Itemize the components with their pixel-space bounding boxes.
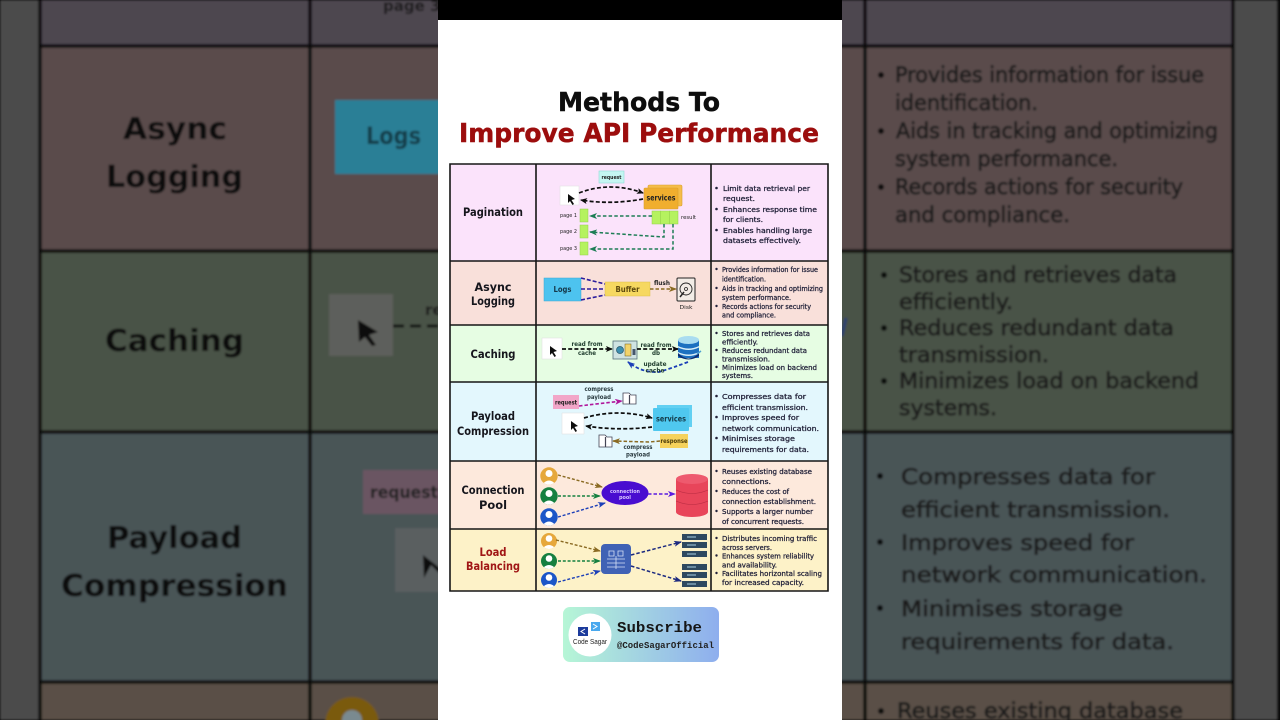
- panel: blurred backdrop right: systems.: [899, 396, 997, 420]
- benefits: pagination: [715, 184, 817, 245]
- subscribe badge: @CodeSagarOfficial: [617, 641, 715, 651]
- diagram: caching: cache: [578, 350, 596, 357]
- row headings: Balancing: [466, 559, 520, 573]
- panel: blurred backdrop right: Records actions for security: [895, 175, 1183, 199]
- benefits: payload compression: Improves speed for: [722, 413, 800, 422]
- subscribe badge: Subscribe: [617, 620, 702, 637]
- panel: blurred backdrop right: Provides information for issue: [895, 63, 1204, 87]
- benefits: connection pool: Reduces the cost of: [722, 487, 789, 496]
- comparison table: [450, 164, 828, 591]
- row headings: Caching: [470, 347, 516, 361]
- diagram: pagination: page 3: [560, 246, 577, 252]
- benefits: async logging: Records actions for security: [722, 302, 812, 311]
- benefits: caching: efficiently.: [722, 338, 758, 346]
- benefits: pagination: datasets effectively.: [723, 236, 801, 245]
- row headings: Load: [480, 545, 506, 559]
- top black bar: [438, 0, 842, 20]
- benefits: connection pool: connections.: [722, 477, 771, 486]
- panel: blurred backdrop right: efficient transmission.: [901, 498, 1170, 522]
- benefits: payload compression: Minimises storage: [722, 434, 795, 443]
- panel: blurred backdrop right: identification.: [895, 91, 1038, 115]
- diagram: caching: db: [652, 350, 661, 357]
- panel: blurred backdrop right: efficiently.: [899, 290, 1013, 314]
- benefits: payload compression: requirements for data.: [722, 445, 809, 454]
- benefits: caching: systems.: [722, 371, 753, 380]
- benefits: pagination: Enables handling large: [723, 226, 812, 235]
- row headings: Async: [474, 280, 512, 294]
- row headings: Connection: [462, 483, 524, 497]
- panel: blurred backdrop right: Minimizes load on backend: [899, 369, 1199, 393]
- diagram: async logging: Logs: [554, 285, 572, 294]
- diagram: payload compression: [553, 387, 692, 458]
- row headings: Pagination: [463, 205, 523, 219]
- benefits: caching: Minimizes load on backend: [722, 363, 817, 372]
- diagram: payload compression: payload: [587, 395, 611, 401]
- diagram: payload compression: compress: [624, 445, 653, 451]
- benefits: load balancing: across servers.: [722, 543, 772, 552]
- benefits: caching: Reduces redundant data: [722, 346, 807, 355]
- panel: blurred backdrop right: Reduces redundant data: [899, 316, 1174, 340]
- panel: blurred backdrop right: network communication.: [901, 563, 1207, 587]
- row headings: Payload: [471, 409, 515, 423]
- benefits: payload compression: efficient transmission.: [722, 403, 808, 412]
- title: [459, 88, 819, 149]
- benefits: caching: Stores and retrieves data: [722, 329, 810, 338]
- diagram: caching: update: [644, 361, 666, 368]
- diagram: connection pool: pool: [619, 495, 631, 501]
- diagram: async logging: Disk: [680, 305, 693, 311]
- diagram: pagination: services: [646, 194, 676, 202]
- panel: blurred backdrop right: [840, 0, 1280, 720]
- benefits: connection pool: Reuses existing database: [722, 467, 812, 476]
- benefits: load balancing: Facilitates horizontal scaling: [722, 569, 822, 578]
- panel: blurred backdrop right: and compliance.: [895, 203, 1070, 227]
- benefits: pagination: for clients.: [723, 215, 763, 224]
- row headings: Logging: [471, 294, 515, 308]
- title: Improve API Performance: [459, 119, 819, 149]
- panel: blurred backdrop right: transmission.: [899, 343, 1049, 367]
- row headings: [457, 205, 529, 573]
- diagram: connection pool: [540, 467, 708, 527]
- benefits: connection pool: [715, 467, 816, 526]
- title: Methods To: [558, 88, 720, 118]
- benefits: caching: transmission.: [722, 354, 770, 364]
- diagram: payload compression: request: [555, 398, 577, 406]
- diagram: caching: cache: [646, 368, 664, 374]
- panel: blurred backdrop left: Async: [123, 112, 227, 147]
- diagram: caching: [542, 336, 701, 374]
- benefits: load balancing: Enhances system reliability: [722, 552, 815, 560]
- diagram: connection pool: connection: [610, 489, 640, 495]
- benefits: payload compression: network communication.: [722, 424, 819, 433]
- benefits: async logging: Provides information for issue: [722, 265, 818, 274]
- benefits: async logging: [715, 265, 823, 320]
- diagram: caching: read from: [640, 342, 672, 349]
- benefits: connection pool: connection establishment.: [722, 497, 816, 506]
- subscribe badge: Code Sagar: [573, 639, 608, 646]
- benefits: async logging: Aids in tracking and optimizing: [722, 284, 823, 293]
- diagram: caching: read from: [572, 341, 602, 348]
- benefits: pagination: Limit data retrieval per: [723, 184, 811, 193]
- benefits: async logging: system performance.: [722, 293, 791, 302]
- panel: blurred backdrop right: Stores and retrieves data: [899, 263, 1177, 287]
- panel: blurred backdrop left: Caching: [105, 324, 244, 359]
- panel: blurred backdrop right: requirements for data.: [901, 630, 1174, 654]
- panel: central white page: [438, 20, 842, 720]
- diagram: payload compression: services: [656, 414, 686, 424]
- diagram: async logging: flush: [654, 279, 670, 287]
- panel: blurred backdrop right: Aids in tracking and optimizing: [896, 119, 1218, 143]
- diagram: pagination: [560, 171, 697, 255]
- diagram: pagination: result: [681, 215, 697, 221]
- panel: blurred backdrop left: request: [370, 483, 438, 503]
- panel: blurred backdrop left: Payload: [107, 521, 242, 556]
- row headings: Pool: [479, 498, 507, 512]
- benefits: pagination: request.: [723, 194, 755, 203]
- benefits: connection pool: of concurrent requests.: [722, 517, 804, 526]
- benefits: connection pool: Supports a larger number: [722, 507, 814, 516]
- panel: blurred backdrop left: Logs: [366, 122, 421, 150]
- benefits: load balancing: [715, 534, 822, 587]
- panel: blurred backdrop right: Minimises storage: [901, 597, 1123, 621]
- benefits: async logging: identification.: [722, 274, 766, 284]
- panel: blurred backdrop left: re: [425, 301, 443, 319]
- diagram: payload compression: payload: [626, 452, 650, 458]
- benefits: payload compression: Compresses data for: [722, 392, 807, 401]
- panel: blurred backdrop left: Logging: [106, 160, 243, 195]
- diagram: async logging: [544, 278, 695, 311]
- diagram: pagination: page 2: [560, 229, 577, 235]
- panel: blurred backdrop left: [0, 0, 443, 720]
- panel: blurred backdrop right: Compresses data for: [901, 465, 1155, 489]
- benefits: load balancing: for increased capacity.: [722, 578, 804, 587]
- diagram: payload compression: response: [660, 437, 688, 445]
- benefits: payload compression: [715, 392, 819, 454]
- diagram: load balancing: [541, 533, 707, 589]
- diagram: pagination: request: [602, 175, 622, 181]
- benefits: async logging: and compliance.: [722, 310, 776, 320]
- diagram: payload compression: compress: [584, 387, 614, 393]
- panel: blurred backdrop right: system performance.: [895, 147, 1118, 171]
- panel: blurred backdrop right: Improves speed for: [901, 531, 1134, 555]
- diagram: async logging: Buffer: [616, 285, 640, 294]
- benefits: pagination: Enhances response time: [723, 205, 817, 214]
- benefits: load balancing: Distributes incoming traffic: [722, 534, 817, 543]
- benefits: caching: [715, 329, 817, 380]
- benefits: load balancing: and availability.: [722, 560, 777, 570]
- panel: blurred backdrop left: Compression: [61, 569, 288, 604]
- row headings: Compression: [457, 424, 529, 438]
- diagram: pagination: page 1: [560, 213, 577, 219]
- subscribe badge: [563, 607, 719, 662]
